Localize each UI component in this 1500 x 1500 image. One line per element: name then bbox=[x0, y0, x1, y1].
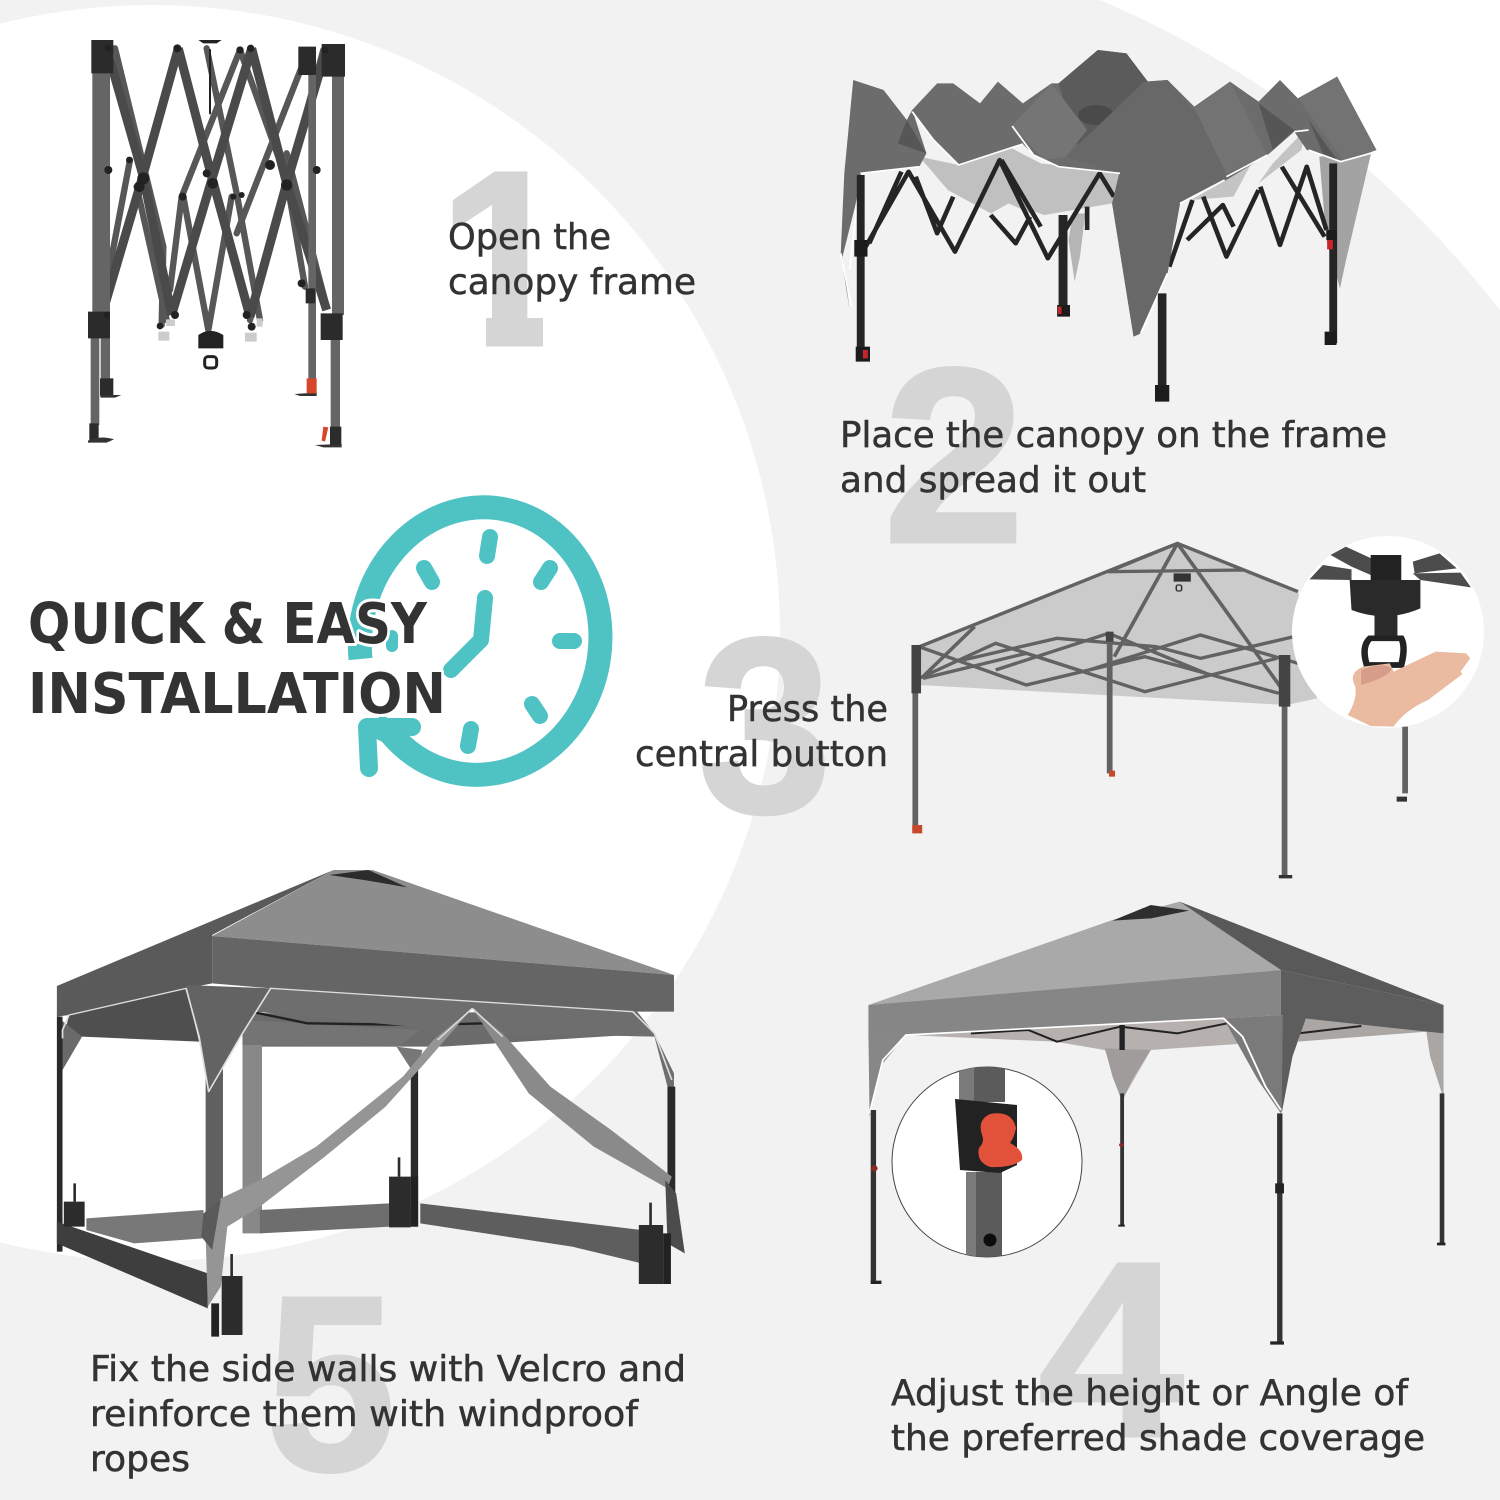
step 3 caption bbox=[635, 689, 888, 775]
step 1 caption: canopy frame bbox=[448, 262, 696, 303]
title: INSTALLATION bbox=[28, 662, 446, 727]
step 4 caption: Adjust the height or Angle of bbox=[891, 1373, 1409, 1414]
step 5 caption: reinforce them with windproof bbox=[90, 1394, 639, 1435]
inset: red height-adjust button bbox=[892, 1060, 1082, 1260]
step 3 caption: central button bbox=[635, 734, 888, 775]
step 4 image: fully open canopy bbox=[868, 902, 1445, 1345]
step 1 caption: Open the bbox=[448, 217, 611, 258]
step 1 caption bbox=[448, 217, 696, 303]
step 1 image: folded frame bbox=[88, 40, 345, 447]
step 5 image: canopy with side walls bbox=[57, 870, 685, 1337]
step 5 caption bbox=[90, 1349, 686, 1480]
step 2 caption: and spread it out bbox=[840, 460, 1146, 501]
step 3 image: frame under canopy bbox=[911, 543, 1407, 878]
step 3 caption: Press the bbox=[727, 689, 888, 730]
step number 3: 3 bbox=[698, 586, 832, 865]
title bbox=[28, 592, 446, 727]
step 4 caption: the preferred shade coverage bbox=[891, 1418, 1425, 1459]
icon: clock with circular arrow bbox=[360, 507, 600, 775]
title: QUICK & EASY bbox=[28, 592, 428, 657]
step 5 caption: ropes bbox=[90, 1439, 190, 1480]
step number 2: 2 bbox=[883, 316, 1025, 595]
step 2 caption bbox=[840, 415, 1387, 501]
step 2 image: canopy draped on frame bbox=[841, 50, 1376, 402]
step number 4: 4 bbox=[1038, 1210, 1184, 1489]
step number 1: 1 bbox=[438, 119, 570, 398]
step 2 caption: Place the canopy on the frame bbox=[840, 415, 1387, 456]
step 4 caption bbox=[891, 1373, 1425, 1459]
inset: central button and hand bbox=[1292, 536, 1484, 728]
step 5 caption: Fix the side walls with Velcro and bbox=[90, 1349, 686, 1390]
